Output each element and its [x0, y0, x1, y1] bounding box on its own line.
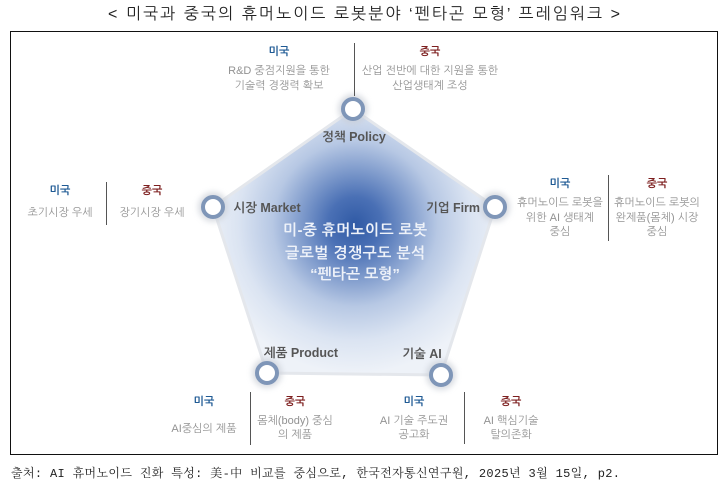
callout: policy: 미국 — [269, 45, 290, 58]
node: firm: 기업 Firm — [426, 201, 480, 215]
callout: market: 장기시장 우세 — [119, 206, 185, 219]
callout: product: 몸체(body) 중심 — [257, 414, 333, 427]
callout: product: 의 제품 — [278, 428, 313, 441]
callout: product: 중국 — [285, 395, 306, 408]
callout: firm: 중심 — [647, 225, 667, 238]
callout: AI: 공고화 — [398, 428, 430, 441]
node: market — [198, 192, 301, 222]
pentagon — [213, 109, 495, 375]
callout: policy — [228, 43, 499, 96]
source note: 출처: AI 휴머노이드 진화 특성: 美-中 비교를 중심으로, 한국전자통신연구원, 2025년 3월 15일, p2. — [11, 465, 620, 481]
callout: firm: 중심 — [550, 225, 570, 238]
callout: firm — [517, 175, 700, 241]
callout: firm: 휴머노이드 로봇의 — [614, 196, 700, 209]
callout: market — [27, 182, 185, 225]
node: policy — [322, 94, 386, 144]
callout: product — [171, 392, 333, 445]
center text: 미-중 휴머노이드 로봇 — [283, 222, 427, 239]
callout: firm: 미국 — [550, 177, 571, 190]
node: policy: 정책 Policy — [322, 130, 386, 144]
center text: “펜타곤 모형” — [310, 266, 400, 283]
callout: AI: AI 핵심기술 — [484, 414, 539, 427]
callout: policy: 기술력 경쟁력 확보 — [235, 79, 324, 92]
callout: AI: AI 기술 주도권 — [380, 414, 448, 427]
node: market: 시장 Market — [233, 201, 301, 215]
callout: market: 초기시장 우세 — [27, 206, 93, 219]
callout: AI — [380, 392, 539, 444]
center text — [283, 222, 427, 283]
callout: product: AI중심의 제품 — [171, 422, 237, 435]
callout: policy: 중국 — [420, 45, 441, 58]
callout: AI: 탈의존화 — [490, 428, 532, 441]
node: AI: 기술 AI — [402, 347, 442, 361]
callout: market: 중국 — [142, 184, 163, 197]
callout: policy: 산업생태계 조성 — [392, 79, 468, 92]
callout: AI: 미국 — [404, 395, 425, 408]
callout: firm: 완제품(몸체) 시장 — [616, 211, 699, 224]
callout: firm: 위한 AI 생태계 — [526, 211, 594, 224]
node: AI — [402, 347, 456, 390]
callout: AI: 중국 — [501, 395, 522, 408]
node: product: 제품 Product — [264, 346, 339, 360]
callout: policy: 산업 전반에 대한 지원을 통한 — [362, 64, 499, 77]
node: product — [252, 346, 339, 388]
title: < 미국과 중국의 휴머노이드 로봇분야 ‘펜타곤 모형’ 프레임워크 > — [108, 5, 620, 23]
callout: firm: 휴머노이드 로봇을 — [517, 196, 604, 209]
callout: firm: 중국 — [647, 177, 668, 190]
callout: product: 미국 — [194, 395, 215, 408]
callout: market: 미국 — [50, 184, 71, 197]
callout: policy: R&D 중점지원을 통한 — [228, 64, 331, 77]
center text: 글로벌 경쟁구도 분석 — [285, 245, 425, 262]
node: firm — [426, 192, 510, 222]
